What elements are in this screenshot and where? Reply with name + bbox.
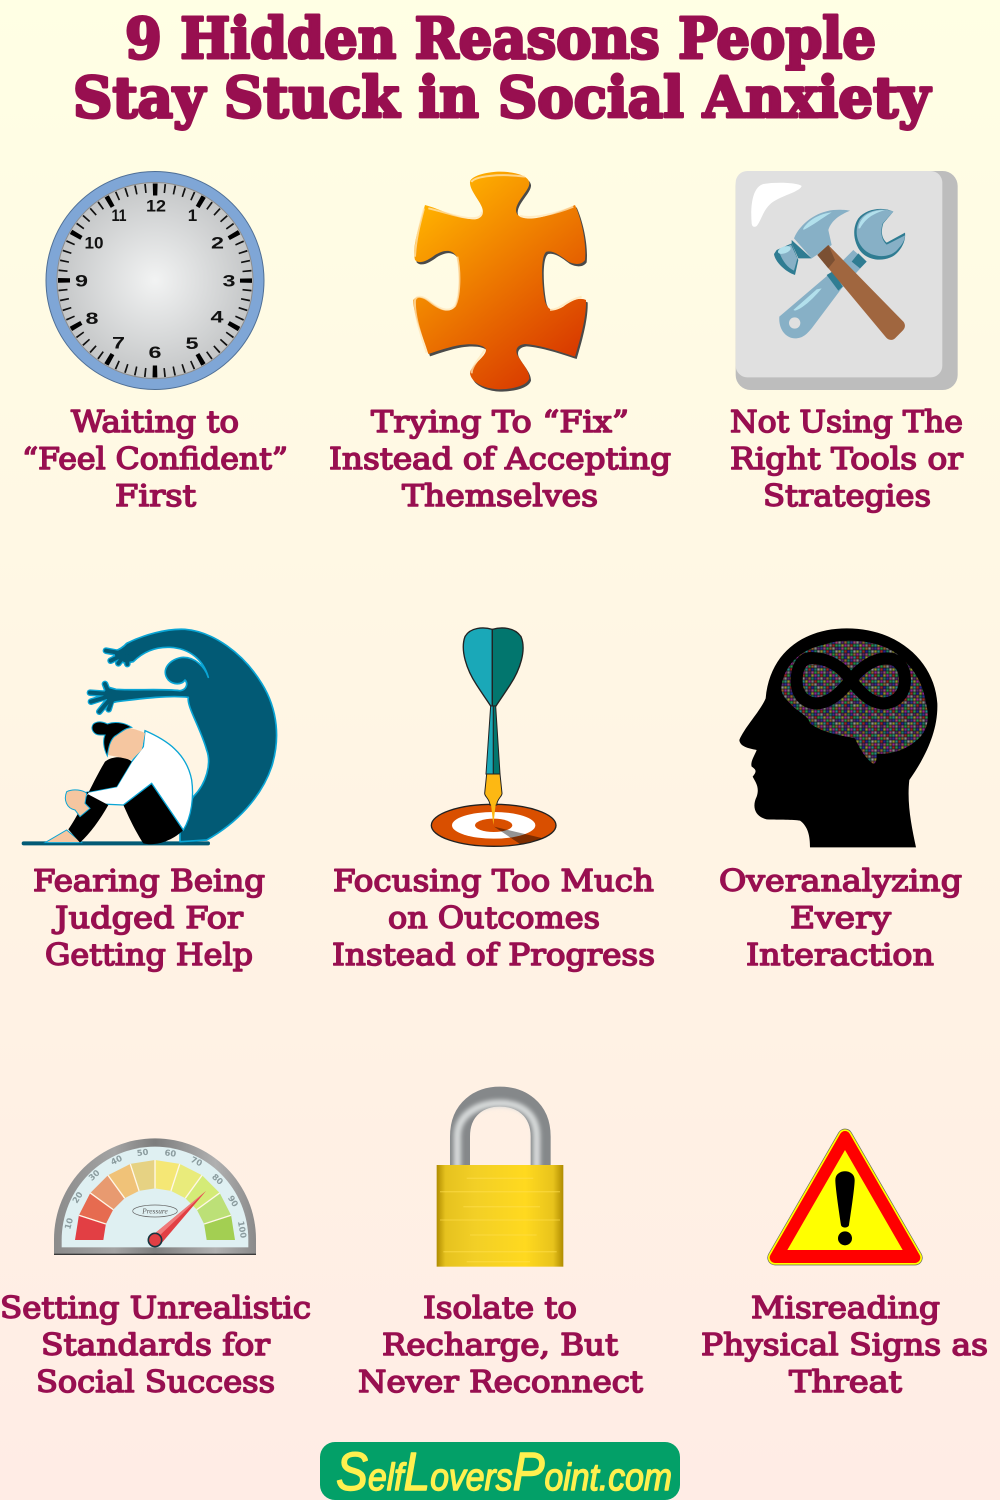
caption: outcomes: Instead of Progress — [332, 938, 655, 973]
caption: overanalyzing: Every — [790, 901, 891, 936]
caption: overanalyzing — [719, 864, 962, 973]
icon: clock: 9 — [75, 272, 88, 290]
caption: standards: Setting Unrealistic — [0, 1291, 311, 1326]
caption: outcomes: on Outcomes — [388, 901, 600, 936]
icon: pressure gauge: Pressure — [141, 1206, 168, 1215]
caption: tools — [730, 405, 964, 514]
icon: pressure gauge — [54, 1138, 256, 1255]
panel: unrealistic standards — [0, 1138, 311, 1400]
panel: fearing being judged — [22, 629, 277, 973]
icon: pressure gauge: 50 — [136, 1147, 149, 1158]
icon: clock: 4 — [210, 308, 224, 326]
caption: fix: Themselves — [402, 479, 598, 514]
caption: physical signs: Misreading — [751, 1291, 940, 1326]
title: Stay Stuck in Social Anxiety — [73, 65, 931, 131]
caption: standards: Social Success — [36, 1365, 275, 1400]
icon: pressure gauge: 100 — [236, 1220, 249, 1239]
icon: hammer and wrench — [736, 171, 958, 390]
icon: clock: 6 — [148, 343, 162, 362]
caption: fix: Instead of Accepting — [329, 442, 671, 477]
caption: waiting: Waiting to — [71, 405, 239, 440]
caption: judged: Getting Help — [45, 938, 253, 973]
icon: pressure gauge: 10 — [62, 1216, 75, 1230]
caption: isolate: Isolate to — [423, 1291, 577, 1326]
caption: waiting: “Feel Confident” — [22, 442, 288, 477]
caption: waiting: First — [115, 479, 196, 514]
icon: clock: 2 — [211, 234, 224, 252]
caption: outcomes: Focusing Too Much — [333, 864, 654, 899]
caption: fix — [329, 405, 671, 514]
icon: pressure gauge: 40 — [109, 1153, 124, 1167]
icon: pressure gauge: 20 — [70, 1190, 85, 1205]
icon: dart and target — [431, 628, 556, 846]
title: 9 Hidden Reasons People — [125, 6, 876, 72]
icon: pressure gauge: 60 — [164, 1147, 177, 1159]
icon: clock: 3 — [222, 272, 236, 290]
icon: puzzle piece — [413, 172, 588, 392]
panel: trying to fix — [329, 172, 671, 514]
caption: isolate: Recharge, But — [382, 1328, 618, 1363]
icon: clock: 1 — [188, 206, 197, 225]
caption: fix: Trying To “Fix” — [371, 405, 629, 440]
icon: pressure gauge: 90 — [226, 1194, 241, 1209]
caption: judged — [33, 864, 265, 973]
caption: isolate: Never Reconnect — [358, 1365, 643, 1400]
caption: physical signs — [701, 1291, 988, 1400]
caption: outcomes — [332, 864, 655, 973]
footer badge: SelfLoversPoint.com — [336, 1441, 672, 1500]
icon: pressure gauge: 70 — [189, 1154, 204, 1168]
icon: clock: 10 — [84, 234, 104, 252]
caption: tools: Not Using The — [730, 405, 963, 440]
panel: waiting to feel confident — [22, 172, 288, 514]
caption: standards — [0, 1291, 311, 1400]
caption: judged: Judged For — [52, 901, 244, 936]
caption: isolate — [358, 1291, 643, 1400]
icon: head with infinity brain — [739, 628, 937, 847]
icon: clock: 8 — [86, 309, 98, 328]
caption: overanalyzing: Interaction — [746, 938, 934, 973]
caption: overanalyzing: Overanalyzing — [719, 864, 962, 899]
icon: clock: 5 — [186, 334, 198, 353]
panel: focusing on outcomes — [332, 628, 655, 973]
panel: not using the right tools — [730, 171, 964, 514]
caption: judged: Fearing Being — [33, 864, 265, 899]
caption: tools: Strategies — [763, 479, 931, 514]
panel: overanalyzing — [719, 628, 962, 973]
icon: pressure gauge: 30 — [86, 1167, 102, 1183]
icon: warning triangle — [775, 1136, 915, 1258]
icon: pressure gauge: 80 — [210, 1172, 225, 1187]
caption: tools: Right Tools or — [730, 442, 964, 477]
caption: physical signs: Physical Signs as — [701, 1328, 988, 1363]
caption: waiting — [22, 405, 288, 514]
icon: person with looming shadow — [22, 629, 277, 845]
panel: misreading physical signs — [701, 1136, 988, 1400]
icon: clock — [46, 172, 264, 390]
caption: physical signs: Threat — [789, 1365, 902, 1400]
icon: clock: 7 — [112, 334, 125, 352]
icon: clock: 12 — [146, 196, 166, 216]
panel: isolate to recharge — [358, 1097, 643, 1400]
title — [73, 6, 931, 131]
icon: padlock — [437, 1097, 563, 1267]
icon: clock: 11 — [112, 206, 126, 225]
caption: standards: Standards for — [41, 1328, 271, 1363]
